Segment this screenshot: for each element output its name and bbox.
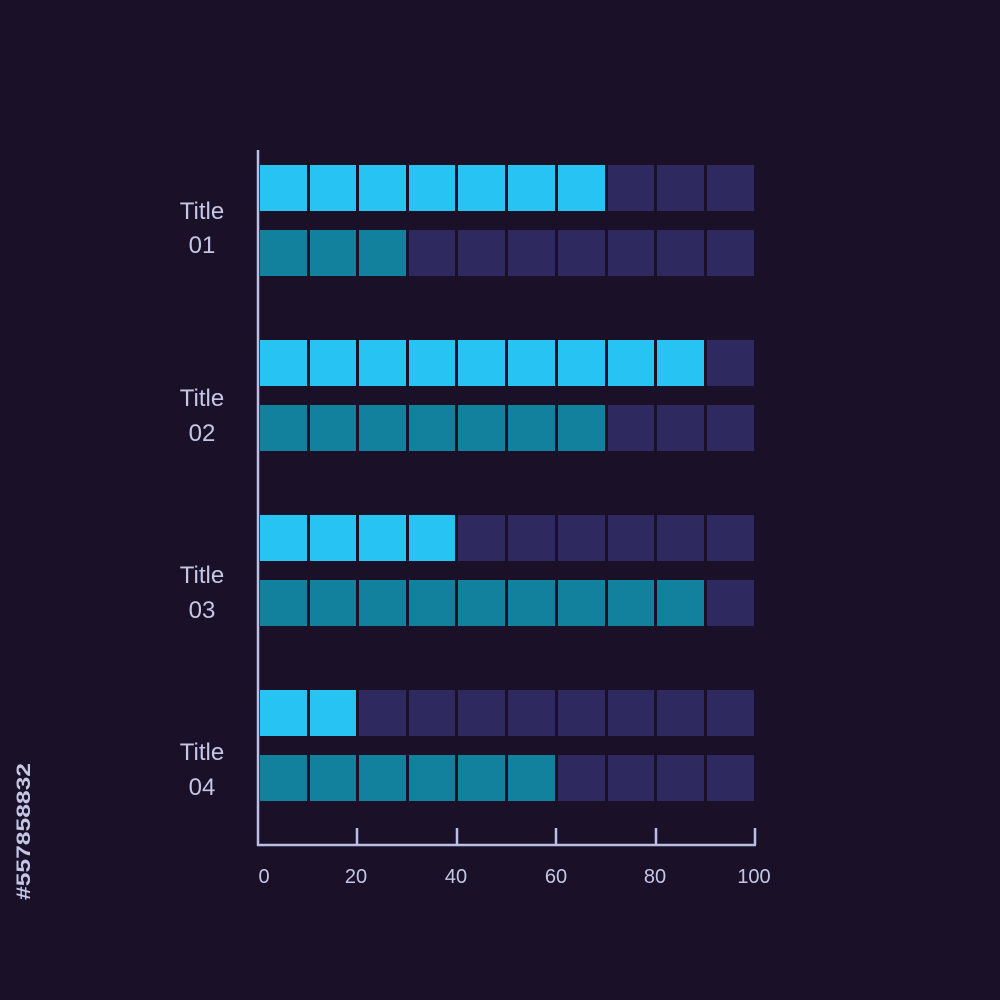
x-axis labels: 60 [545, 866, 567, 888]
category labels: Title [180, 385, 224, 412]
chart: grouped block bars [260, 165, 754, 801]
category labels: 01 [189, 232, 215, 259]
category labels: 02 [189, 420, 215, 447]
x-axis labels: 20 [345, 866, 367, 888]
side id text: #557858832 [14, 763, 35, 900]
axes [257, 150, 756, 846]
category labels [180, 198, 224, 801]
x-axis labels: 0 [258, 866, 270, 888]
category labels: 03 [189, 597, 215, 624]
category labels: Title [180, 739, 224, 766]
category labels: 04 [189, 774, 215, 801]
category labels: Title [180, 562, 224, 589]
row group 04 [260, 690, 754, 801]
x-axis labels: 80 [644, 866, 666, 888]
row group 02 [260, 340, 754, 451]
x-axis labels: 40 [445, 866, 467, 888]
row group 01 [260, 165, 754, 276]
category labels: Title [180, 198, 224, 225]
x-axis labels: 100 [737, 866, 771, 888]
x-axis labels [258, 866, 771, 888]
row group 03 [260, 515, 754, 626]
